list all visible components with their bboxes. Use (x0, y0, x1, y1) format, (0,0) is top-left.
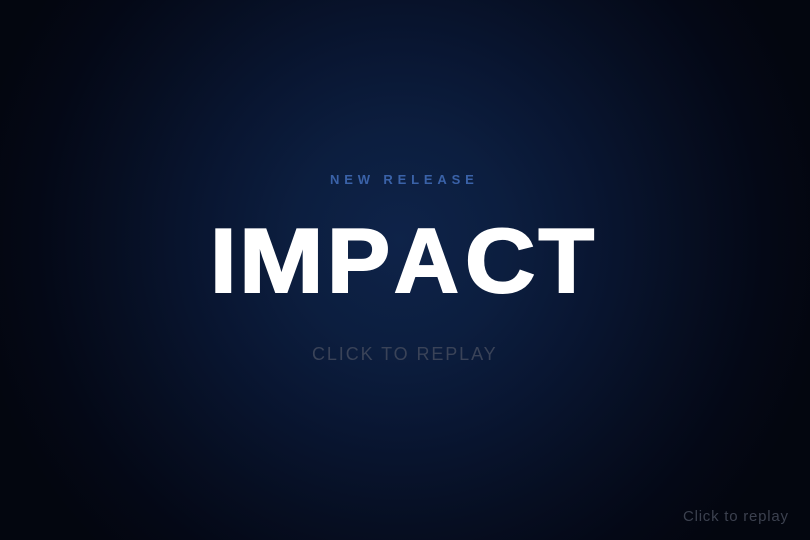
title: C (465, 211, 535, 312)
title: M (239, 211, 324, 312)
title (210, 211, 594, 312)
eyebrow label: NEW RELEASE (330, 172, 479, 187)
replay prompt: CLICK TO REPLAY (312, 344, 498, 364)
title: A (394, 211, 459, 312)
title: P (327, 211, 390, 312)
title: I (210, 211, 236, 312)
title: T (538, 211, 594, 312)
corner replay hint: Click to replay (683, 508, 789, 525)
